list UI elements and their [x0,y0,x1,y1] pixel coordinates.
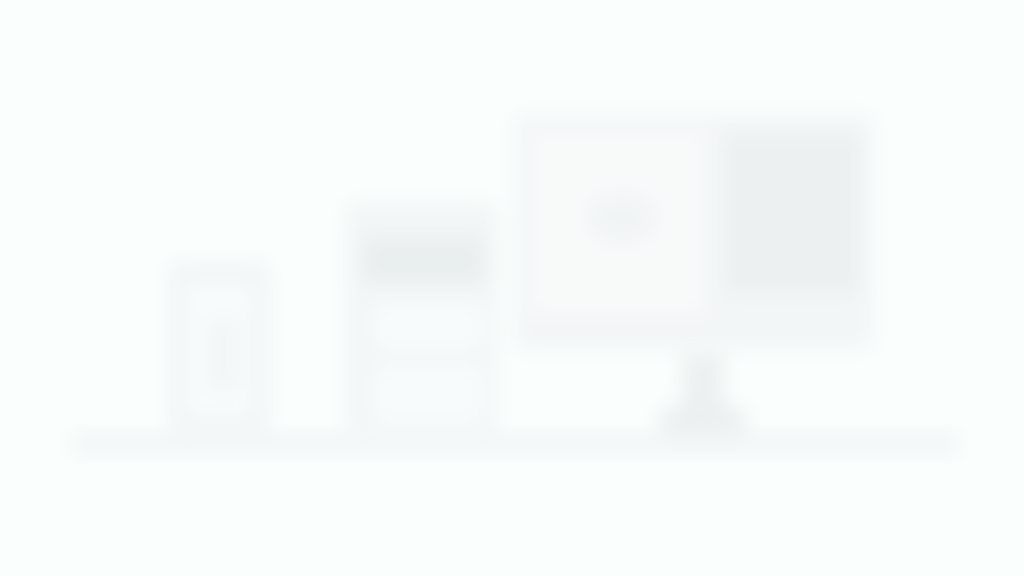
icon: tablet [346,202,498,438]
icon: monitor [514,114,874,436]
icon: phone [168,262,270,438]
monitor screen [514,114,874,350]
desk surface [72,432,958,456]
monitor stand [660,352,746,436]
